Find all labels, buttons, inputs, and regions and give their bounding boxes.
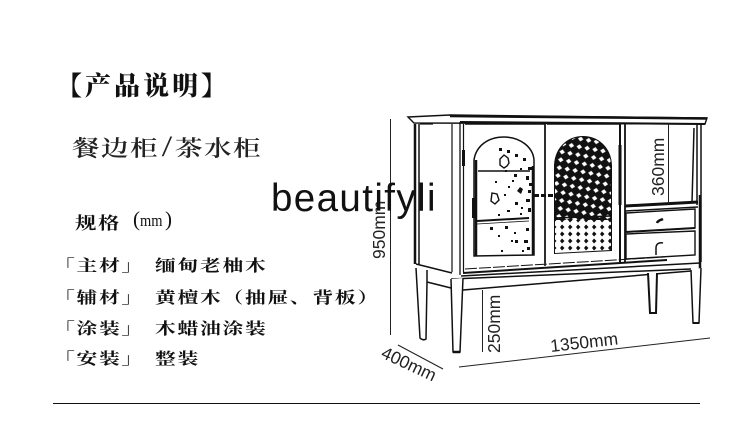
watermark text: beautifyli	[271, 177, 437, 220]
leg: front left	[451, 278, 463, 352]
label: 360mm: 360mm	[648, 138, 668, 196]
label: 950mm: 950mm	[369, 201, 389, 259]
lower drawer	[626, 231, 695, 259]
row: assembly	[54, 346, 200, 369]
dimension: width line	[459, 338, 710, 367]
row: secondary material: 「辅材」	[54, 285, 144, 308]
title: product description: 【产品说明】	[56, 66, 230, 103]
cabinet side and frame	[415, 122, 701, 276]
row: secondary material	[54, 285, 380, 308]
leg: front right	[691, 268, 701, 323]
row: assembly: 「安装」	[54, 346, 144, 369]
cabinet line drawing with dimensions	[53, 114, 710, 404]
label: 1350mm: 1350mm	[549, 328, 619, 356]
row: assembly: 整装	[155, 346, 200, 369]
spec heading	[75, 207, 172, 234]
spec unit: mm	[140, 211, 162, 230]
left door glass speckle	[490, 148, 532, 252]
right door lattice glass	[555, 137, 612, 254]
leg: back left	[416, 268, 427, 340]
label: 250mm: 250mm	[484, 295, 504, 353]
row: finish	[54, 316, 267, 339]
dimension: shelf line	[668, 124, 670, 203]
dimension: height line	[390, 119, 392, 335]
subtitle: sideboard / tea cabinet: 餐边柜 茶水柜	[72, 132, 262, 163]
spec label: 规格	[75, 209, 121, 234]
dimension: leg line	[482, 290, 484, 352]
right open shelf	[625, 124, 698, 262]
right door	[547, 124, 620, 262]
spec unit: ( )	[133, 207, 172, 231]
upper drawer	[626, 209, 695, 232]
drawers	[626, 209, 695, 259]
row: main material: 缅甸老柚木	[155, 253, 267, 276]
label: 400mm: 400mm	[378, 342, 440, 385]
bottom rule	[53, 402, 700, 404]
row: finish: 「涂装」	[54, 316, 144, 339]
dimension: depth line	[398, 345, 443, 369]
cabinet top	[408, 115, 707, 124]
row: main material: 「主材」	[54, 253, 144, 276]
bottom rails	[427, 257, 700, 290]
left door	[465, 124, 545, 266]
row: finish: 木蜡油涂装	[155, 316, 267, 339]
spec table	[54, 253, 380, 369]
row: main material	[54, 253, 267, 276]
subtitle: sideboard / tea cabinet: /	[162, 130, 172, 163]
center door latch	[534, 194, 558, 197]
row: secondary material: 黄檀木（抽屉、背板）	[155, 285, 380, 308]
leg: back right	[648, 273, 657, 313]
